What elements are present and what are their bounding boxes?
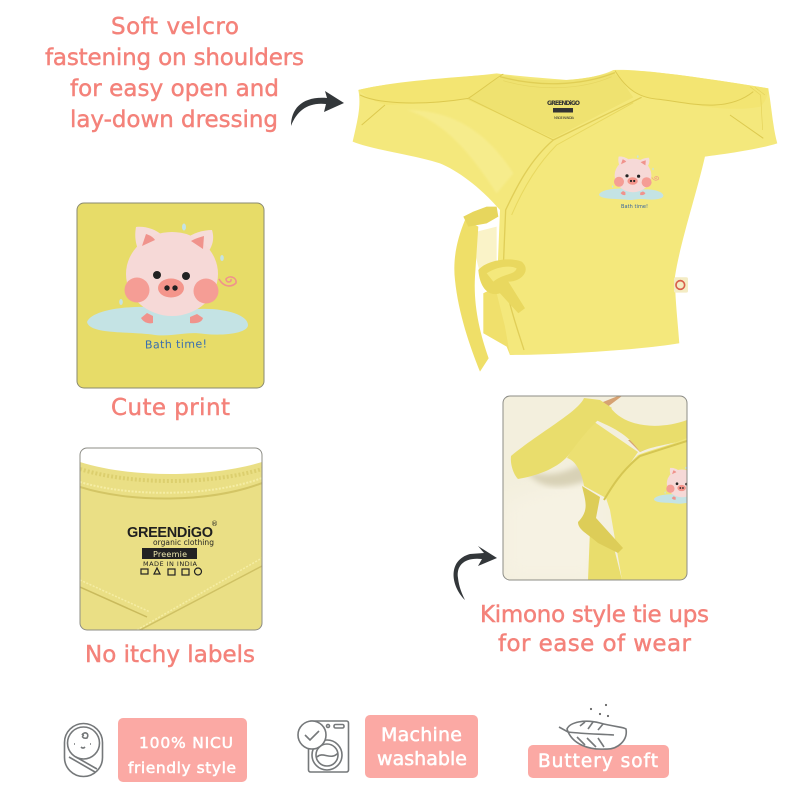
heading: soft velcro fastening: for easy open and — [70, 76, 279, 102]
caption: kimono style: Kimono style tie ups — [480, 602, 709, 628]
brand label text: MADE IN INDIA — [143, 560, 198, 568]
brand label text: GREENDiGO — [127, 525, 213, 541]
sleeve seams — [362, 105, 763, 138]
front lower strip — [588, 536, 622, 580]
small pig print — [599, 155, 663, 200]
badge: NICU friendly: 100% NICU — [139, 734, 233, 752]
heading: soft velcro fastening: lay-down dressing — [70, 107, 278, 133]
icon: feather — [559, 704, 626, 749]
tie strip — [454, 220, 489, 372]
panel: itchy-free label — [80, 448, 262, 630]
brand label text: organic clothing — [153, 538, 214, 547]
lower tie knot — [478, 259, 526, 313]
back of neck — [467, 72, 633, 138]
pig on garment — [654, 466, 686, 504]
sleeve — [511, 398, 612, 479]
arrow: to shoulder — [291, 91, 344, 126]
ties — [578, 486, 623, 553]
brand label text: ® — [211, 520, 218, 528]
brand label text — [127, 520, 218, 575]
badge: NICU friendly: friendly style — [128, 759, 236, 777]
badge: machine washable — [365, 715, 478, 778]
garment front — [606, 438, 687, 580]
caption: no itchy labels: No itchy labels — [85, 642, 255, 668]
sleeve shadow — [529, 464, 584, 489]
product photo: yellow kimono top — [353, 70, 777, 372]
print caption: Bath time! — [145, 337, 207, 352]
heading: soft velcro fastening: fastening on shoulders — [45, 45, 304, 71]
collar — [592, 407, 687, 452]
shirt body — [353, 70, 777, 355]
caption: kimono style — [480, 602, 709, 657]
badge: machine washable: Machine — [381, 724, 462, 746]
caption: cute print: Cute print — [111, 395, 230, 421]
upper tie knot — [463, 207, 498, 227]
fabric — [80, 462, 262, 630]
shadow side fill behind ties — [470, 227, 497, 273]
back lower panel — [483, 287, 527, 355]
back panel — [567, 419, 638, 498]
side tag — [674, 277, 688, 293]
badge: machine washable: washable — [377, 748, 467, 770]
panel: kimono ties photo — [503, 396, 707, 580]
arrow: to kimono ties — [454, 546, 497, 600]
neck label on product: MADE IN INDIA — [554, 116, 575, 120]
icon: washing machine — [298, 721, 348, 772]
caption: kimono style: for ease of wear — [498, 631, 692, 657]
shading — [407, 110, 513, 193]
neck label on product: GREENDiGO — [547, 100, 580, 107]
pig illustration — [87, 224, 248, 335]
shoulder flaps — [358, 74, 503, 105]
heading: soft velcro fastening: Soft velcro — [111, 14, 239, 40]
hanger — [603, 396, 647, 452]
wrap front edge — [503, 97, 642, 350]
badge: NICU friendly — [118, 718, 247, 782]
neck label on product — [547, 100, 580, 120]
small print caption: Bath time! — [621, 204, 648, 210]
heading: soft velcro fastening — [45, 14, 304, 133]
badge: buttery soft: Buttery soft — [538, 751, 658, 772]
brand label text: Preemie — [153, 550, 187, 559]
badge: buttery soft — [528, 745, 669, 778]
panel: cute print — [77, 203, 264, 388]
icon: swaddled baby — [64, 724, 102, 776]
